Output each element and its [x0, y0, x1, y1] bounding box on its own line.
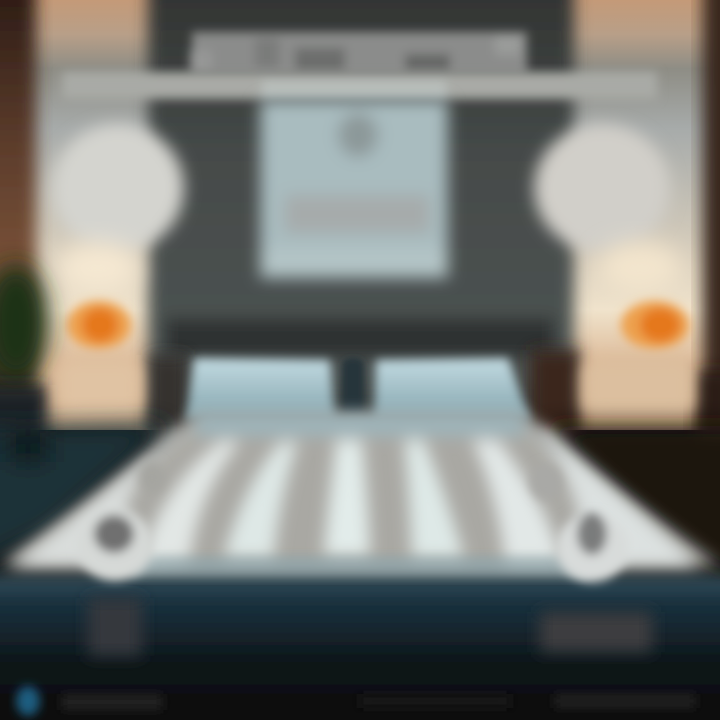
- left pillow: [186, 358, 335, 420]
- right lamp base: [582, 358, 694, 416]
- striped bed: [0, 414, 720, 566]
- left bed badge: [77, 509, 153, 581]
- right circle: [534, 124, 670, 252]
- headboard: [148, 0, 574, 440]
- dark base right: [695, 370, 720, 440]
- stripe 3: [224, 442, 298, 558]
- footer logo dot: [16, 686, 40, 716]
- left circle: [52, 124, 184, 252]
- pillow divider: [342, 358, 364, 414]
- footer left text: [62, 694, 162, 710]
- left orange lamp: [67, 301, 131, 349]
- centre panel: [260, 100, 448, 278]
- footer right text: [555, 694, 695, 708]
- left lamp glow: [56, 242, 140, 294]
- footer: [0, 576, 720, 720]
- footer centre text: [360, 694, 510, 708]
- headboard side posts: [148, 350, 580, 435]
- stripe 5: [404, 440, 464, 558]
- stripe 2: [140, 440, 240, 564]
- centre stripe: [324, 440, 370, 556]
- left curtain edge: [0, 0, 36, 400]
- plant: [0, 264, 48, 380]
- right orange lamp: [621, 301, 689, 349]
- subtitle band: [62, 72, 657, 100]
- left nightstand: [0, 424, 170, 570]
- outer left stripe: [10, 425, 195, 566]
- right lamp glow: [598, 242, 682, 294]
- left caption: [88, 598, 142, 656]
- right bed badge: [556, 513, 628, 582]
- outer right stripe: [528, 425, 700, 566]
- right caption: [540, 612, 652, 652]
- bed edge haze: [130, 556, 590, 578]
- small upper right mark: [530, 464, 562, 500]
- right curtain edge: [703, 0, 720, 450]
- right nightstand: [540, 426, 720, 580]
- left lamp base: [56, 358, 142, 416]
- stripe 6: [472, 440, 562, 562]
- title block: [190, 32, 527, 74]
- upper bed haze: [195, 414, 525, 436]
- right pillow: [374, 358, 530, 420]
- dark base left: [0, 385, 48, 445]
- small upper left mark: [139, 461, 165, 493]
